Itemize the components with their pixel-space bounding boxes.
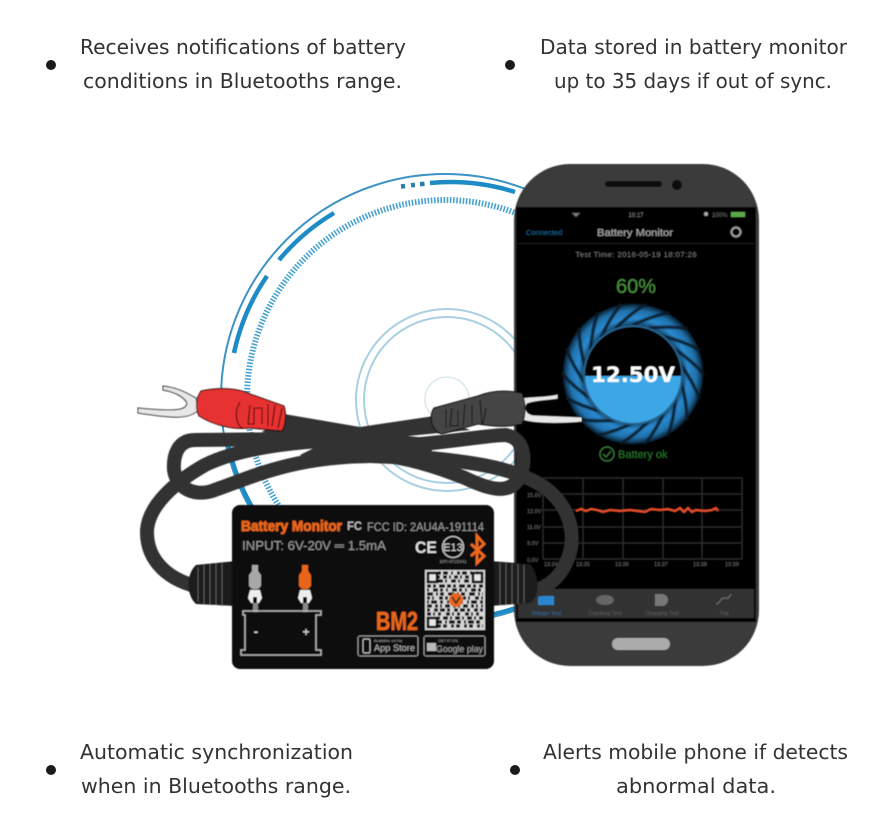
red plug ribs bbox=[236, 402, 282, 428]
black plug sleeve bbox=[431, 391, 525, 434]
FCC id: FCC ID: 2AU4A-191114 bbox=[367, 522, 485, 534]
bottom tab bar: Cranking Test bbox=[588, 611, 622, 617]
text block: bottom right bullet bbox=[510, 740, 848, 798]
app header bbox=[517, 228, 755, 244]
module body bbox=[232, 505, 494, 669]
right outer strand bbox=[430, 458, 572, 591]
certification marks: E13 bbox=[443, 542, 463, 554]
status bar bbox=[572, 212, 745, 219]
text block: bottom left bullet: Automatic synchronization bbox=[80, 740, 353, 764]
certification marks bbox=[415, 536, 467, 564]
status bar: 100% bbox=[712, 213, 728, 219]
left outer strand bbox=[147, 440, 340, 588]
voltage dial bbox=[563, 304, 703, 444]
text block: top left bullet: Receives notifications of battery bbox=[80, 35, 406, 59]
text block: bottom right bullet: abnormal data. bbox=[616, 774, 776, 798]
grey terminal bbox=[249, 565, 261, 589]
left upper loop bbox=[174, 439, 370, 493]
model name: BM2 bbox=[376, 606, 418, 636]
QR code bbox=[425, 570, 485, 630]
left ribbed connector bbox=[188, 561, 236, 606]
voltage line chart: 12.0V bbox=[527, 509, 542, 515]
cables bbox=[147, 414, 572, 591]
FCC id: FC bbox=[347, 519, 362, 533]
bottom tab bar bbox=[518, 589, 754, 618]
voltage line chart: 9.0V bbox=[527, 541, 539, 547]
FCC id bbox=[347, 519, 485, 534]
voltage line chart: 13:35 bbox=[576, 562, 590, 568]
battery percent: 60% bbox=[616, 276, 656, 298]
battery monitor module bbox=[232, 505, 494, 669]
icon: battery with terminals bbox=[241, 565, 321, 655]
phone screen bbox=[516, 207, 756, 622]
red positive plug with fork bbox=[138, 386, 285, 431]
voltage line chart: 13:36 bbox=[615, 562, 629, 568]
text block: top left bullet: conditions in Bluetooths range. bbox=[83, 69, 402, 93]
app store badge bbox=[358, 636, 418, 656]
status bar: 16:17 bbox=[628, 213, 644, 219]
voltage line chart: 15.0V bbox=[527, 493, 542, 499]
text block: top left bullet bbox=[46, 35, 406, 93]
black plug fork bbox=[522, 394, 582, 423]
orange terminal bbox=[299, 565, 311, 589]
phone home button bbox=[612, 638, 670, 650]
cable strands bbox=[147, 435, 572, 591]
certification marks: CE bbox=[415, 538, 437, 557]
module title: Battery Monitor bbox=[241, 518, 342, 535]
google play badge: Google play bbox=[436, 644, 483, 655]
voltage line chart bbox=[527, 478, 742, 568]
phone speaker and camera bbox=[605, 180, 682, 190]
phone body bbox=[514, 164, 759, 666]
voltage dial: 12.50V bbox=[591, 363, 676, 387]
text block: bottom left bullet: when in Bluetooths range. bbox=[81, 774, 351, 798]
cable bundle centre bbox=[262, 414, 470, 466]
signal rings behind the phone bbox=[221, 174, 669, 622]
battery status: Battery ok bbox=[618, 449, 668, 461]
app header: Connected bbox=[526, 228, 562, 237]
red plug fork bbox=[138, 386, 198, 417]
voltage line chart: 13:37 bbox=[654, 562, 668, 568]
bottom tab bar: Voltage Test bbox=[531, 611, 561, 617]
dial twisted ribs bbox=[563, 305, 703, 443]
battery status bbox=[600, 447, 668, 461]
battery body bbox=[241, 611, 321, 655]
text block: top right bullet bbox=[505, 35, 848, 93]
right ribbed connector bbox=[490, 561, 538, 606]
red plug sleeve bbox=[197, 389, 285, 431]
icon: bluetooth bbox=[471, 536, 484, 563]
bottom tab bar: Charging Test bbox=[645, 611, 679, 617]
voltage line chart: 13:34 bbox=[544, 562, 558, 568]
google play badge: GET IT ON bbox=[438, 638, 458, 643]
google play badge bbox=[424, 636, 485, 656]
black negative plug with fork bbox=[431, 391, 582, 434]
right upper loop bbox=[380, 435, 524, 489]
voltage line chart: 13:38 bbox=[693, 562, 707, 568]
input rating: INPUT: 6V-20V ═ 1.5mA bbox=[242, 538, 386, 553]
icon: battery with terminals: - bbox=[254, 623, 259, 639]
certification marks: 10R-0715441 bbox=[439, 559, 467, 564]
text block: bottom right bullet: Alerts mobile phone if detects bbox=[543, 740, 848, 764]
text block: top right bullet: Data stored in battery monitor bbox=[540, 35, 848, 59]
voltage line chart: 13:39 bbox=[725, 562, 739, 568]
app store badge: Available on the bbox=[374, 638, 403, 643]
text block: bottom left bullet bbox=[46, 740, 353, 798]
voltage line chart: 0.0V bbox=[527, 558, 539, 564]
app store badge: App Store bbox=[374, 643, 415, 654]
test time: Test Time: 2016-05-19 18:07:26 bbox=[576, 250, 696, 259]
phone bbox=[514, 164, 759, 666]
black plug ribs bbox=[446, 400, 486, 428]
bottom tab bar: Trip bbox=[719, 611, 729, 617]
text block: top right bullet: up to 35 days if out of sync. bbox=[554, 69, 832, 93]
icon: battery with terminals: + bbox=[302, 625, 310, 639]
app header: Battery Monitor bbox=[597, 228, 674, 239]
voltage line chart: 11.0V bbox=[527, 525, 541, 531]
